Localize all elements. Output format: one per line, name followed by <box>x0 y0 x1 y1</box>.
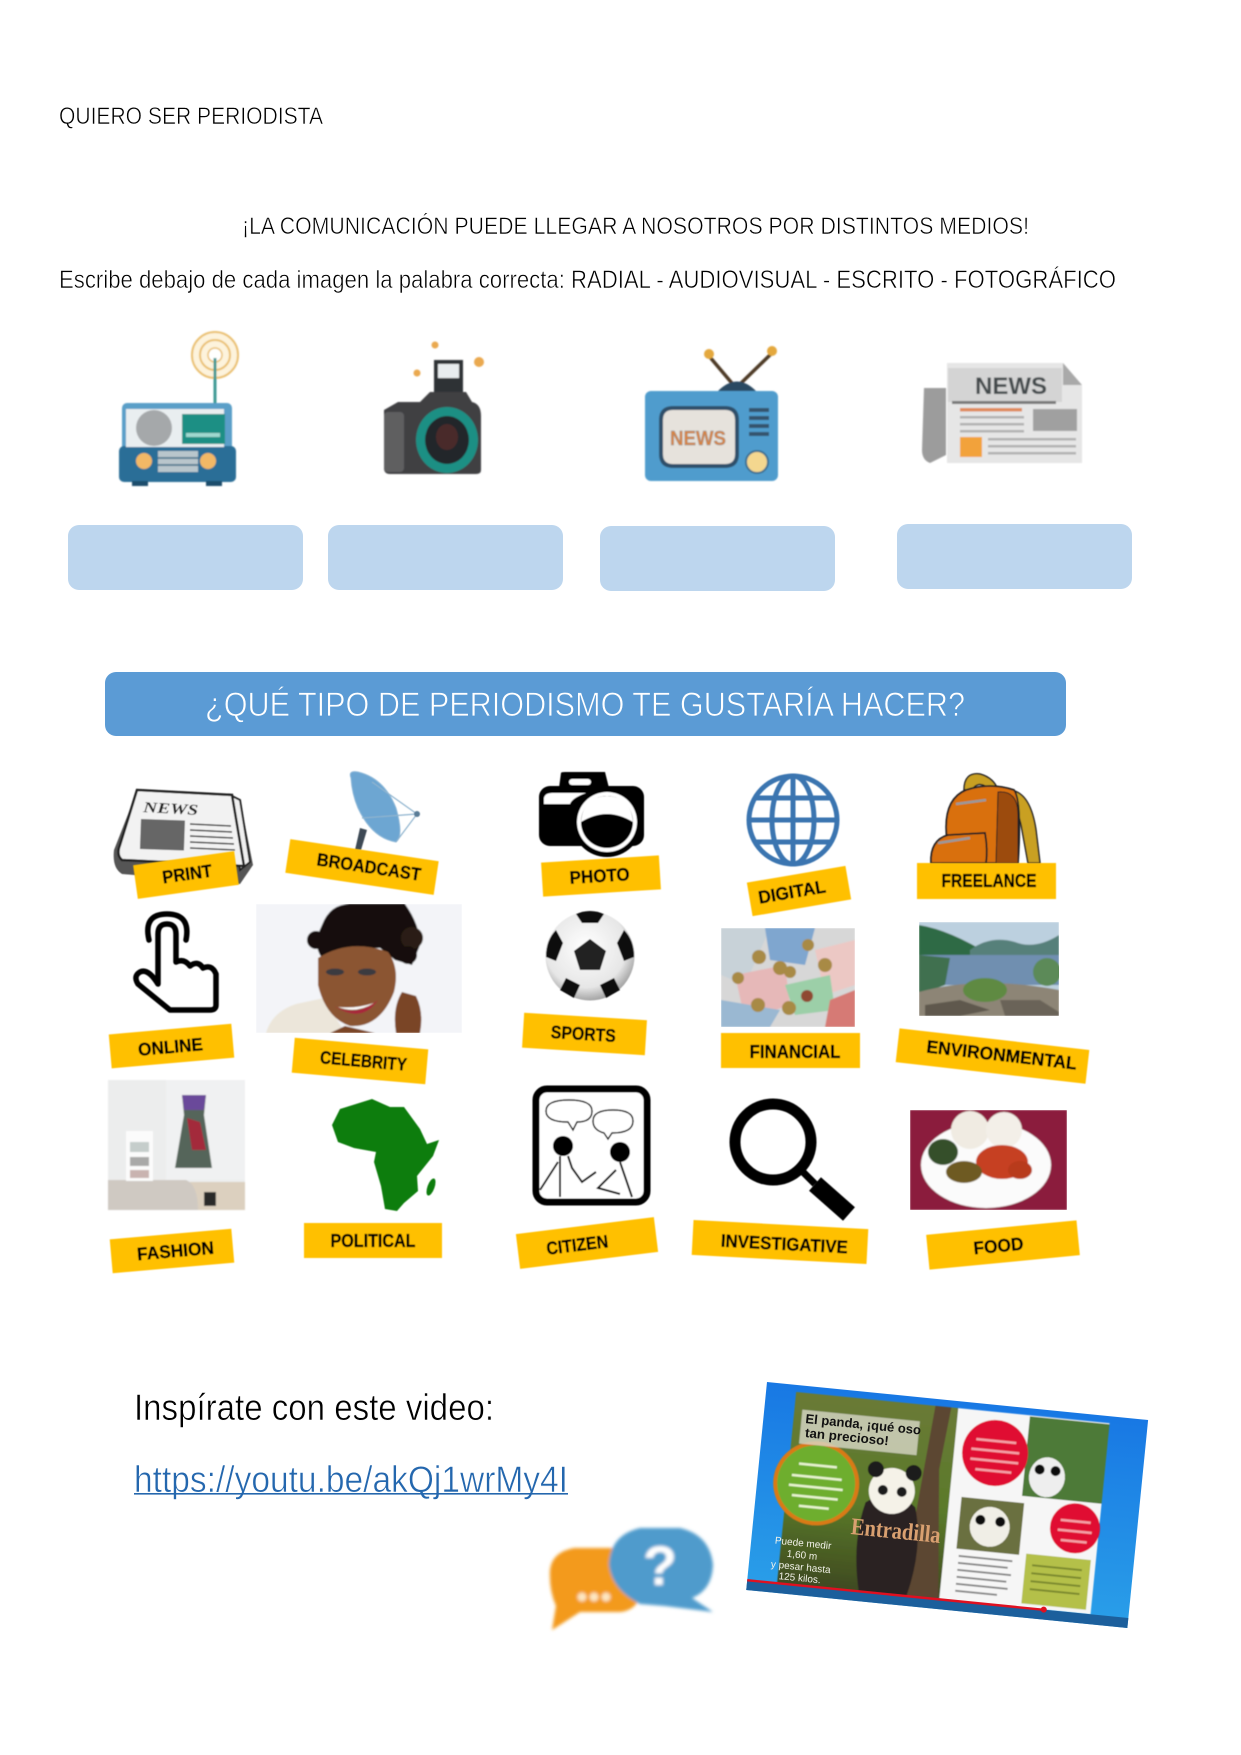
progress line <box>747 1577 1047 1613</box>
label: CELEBRITY: CELEBRITY <box>319 1047 408 1075</box>
panda size caption: 125 kilos. <box>778 1571 821 1586</box>
icon: magnifying glass <box>735 1104 849 1214</box>
label: FOOD <box>926 1220 1080 1270</box>
label: FINANCIAL: FINANCIAL <box>750 1042 840 1062</box>
icon: globe <box>749 776 837 864</box>
video title line two: tan precioso! <box>804 1425 889 1448</box>
label: INVESTIGATIVE: INVESTIGATIVE <box>720 1231 848 1257</box>
video prompt text: Inspírate con este video: <box>134 1387 494 1428</box>
title card <box>799 1410 920 1455</box>
label: PHOTO <box>541 855 661 897</box>
label: POLITICAL <box>304 1223 442 1258</box>
label: CITIZEN <box>516 1217 658 1269</box>
label: PRINT <box>133 851 239 899</box>
icon: television <box>645 346 778 481</box>
icon: radio <box>119 332 238 486</box>
label: PRINT: PRINT <box>161 861 213 887</box>
label: FASHION <box>110 1229 234 1273</box>
map: Africa <box>332 1099 439 1211</box>
instruction text: Escribe debajo de cada imagen la palabra correcta: RADIAL - AUDIOVISUAL - ESCRITO - FOTOGRÁFICO <box>59 265 1116 294</box>
banner heading <box>105 672 1066 736</box>
icon: newspaper <box>922 363 1082 463</box>
left page jungle <box>777 1392 958 1599</box>
icon: print newspaper: NEWS <box>141 800 199 819</box>
video link: https://youtu.be/akQj1wrMy4I <box>134 1459 568 1500</box>
icon: chat bubbles: ? <box>643 1534 677 1597</box>
panda <box>852 1460 925 1597</box>
label: DIGITAL <box>747 866 851 916</box>
banner heading: ¿QUÉ TIPO DE PERIODISMO TE GUSTARÍA HACER? <box>205 686 965 724</box>
label: FINANCIAL <box>721 1033 860 1068</box>
panda size caption: 1,60 m <box>786 1549 818 1563</box>
photo: money <box>721 928 855 1027</box>
green circle text stripes <box>787 1463 845 1510</box>
answer box 3 <box>600 526 835 591</box>
video title: El panda, ¡qué oso <box>805 1411 922 1437</box>
label: DIGITAL: DIGITAL <box>757 876 827 908</box>
tree trunk <box>896 1404 957 1599</box>
label: BROADCAST <box>285 839 439 895</box>
icon: soccer ball <box>546 911 634 1000</box>
page title: QUIERO SER PERIODISTA <box>59 103 323 130</box>
icon: backpack <box>931 774 1040 863</box>
photo: lake landscape <box>919 922 1061 1016</box>
icon: print newspaper <box>114 790 253 884</box>
answer box 2 <box>328 525 563 590</box>
answer box 4 <box>897 524 1132 589</box>
overlay word: Entradilla <box>850 1514 942 1549</box>
label: FREELANCE: FREELANCE <box>942 871 1036 891</box>
label: FREELANCE <box>917 863 1056 899</box>
red circle stripes <box>969 1439 1020 1473</box>
label: POLITICAL: POLITICAL <box>330 1231 416 1251</box>
label: ENVIRONMENTAL: ENVIRONMENTAL <box>926 1037 1078 1074</box>
label: ONLINE <box>109 1024 234 1068</box>
heading: communication media: ¡LA COMUNICACIÓN PUEDE LLEGAR A NOSOTROS POR DISTINTOS MEDIOS! <box>242 213 1029 240</box>
label: SPORTS <box>522 1013 647 1055</box>
icon: citizen dialogue <box>536 1089 647 1202</box>
photo: food plate <box>910 1110 1067 1210</box>
label: INVESTIGATIVE <box>692 1220 868 1264</box>
icon: newspaper: NEWS <box>975 373 1047 400</box>
icon: television: NEWS <box>670 428 726 450</box>
panda size caption: y pesar hasta <box>770 1559 832 1576</box>
icon: chat bubbles <box>550 1528 713 1630</box>
label: BROADCAST: BROADCAST <box>315 849 422 885</box>
label: CITIZEN: CITIZEN <box>545 1231 609 1259</box>
icon: satellite dish <box>350 772 420 850</box>
label: SPORTS: SPORTS <box>550 1022 616 1046</box>
label: ENVIRONMENTAL <box>896 1028 1089 1084</box>
video screenshot <box>746 1382 1148 1628</box>
icon: photo camera <box>384 342 484 474</box>
photo: celebrity portrait <box>256 904 462 1033</box>
panda size caption: Puede medir <box>774 1536 833 1552</box>
photo: fashion room <box>108 1080 245 1210</box>
icon: black camera <box>539 772 644 857</box>
label: CELEBRITY <box>292 1038 428 1084</box>
label: FASHION: FASHION <box>136 1238 215 1264</box>
video control bar <box>746 1580 1128 1628</box>
icon: pointing hand <box>136 914 216 1010</box>
label: PHOTO: PHOTO <box>569 864 630 888</box>
label: FOOD: FOOD <box>973 1234 1024 1258</box>
right page <box>939 1408 1110 1614</box>
green circle <box>771 1440 861 1527</box>
answer box 1 <box>68 525 303 590</box>
label: ONLINE: ONLINE <box>137 1034 204 1060</box>
